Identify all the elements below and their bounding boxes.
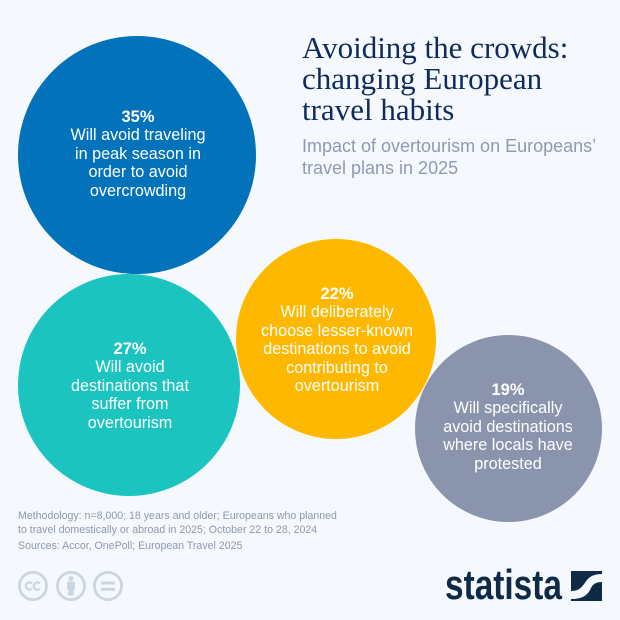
label: 22%: Will deliberately xyxy=(280,303,394,321)
label: 35%: overcrowding xyxy=(90,182,186,200)
subtitle xyxy=(302,136,596,178)
label: 35%: in peak season in xyxy=(75,145,201,163)
subtitle: Impact of overtourism on Europeans’ xyxy=(302,136,596,156)
label: 35% xyxy=(70,108,205,200)
label: 22%: overtourism xyxy=(295,377,379,395)
circle: 19% xyxy=(415,335,602,522)
title: travel habits xyxy=(302,92,454,127)
title xyxy=(302,30,568,127)
label: 19% xyxy=(443,381,573,473)
methodology note: to travel domestically or abroad in 2025; October 22 to 28, 2024 xyxy=(18,524,317,536)
label: 19%: Will specifically xyxy=(454,399,562,417)
icon: creative commons licence xyxy=(18,571,123,601)
circle: 35% xyxy=(18,36,256,274)
label: 27% xyxy=(71,340,189,432)
label: 19%: 19% xyxy=(491,381,525,399)
subtitle: travel plans in 2025 xyxy=(302,158,458,178)
label: 22%: contributing to xyxy=(286,359,388,377)
label: 22% xyxy=(261,285,413,395)
label: 22%: 22% xyxy=(320,285,354,303)
label: 27%: 27% xyxy=(113,340,147,358)
label: 27%: overtourism xyxy=(88,414,172,432)
label: 35%: Will avoid traveling xyxy=(71,126,205,144)
label: 27%: suffer from xyxy=(91,395,169,413)
label: 22%: destinations to avoid xyxy=(263,340,411,358)
label: 22%: choose lesser-known xyxy=(261,322,413,340)
label: 27%: Will avoid xyxy=(95,358,165,376)
methodology note: Methodology: n=8,000; 18 years and older; Europeans who planned xyxy=(18,510,337,522)
label: 27%: destinations that xyxy=(71,377,189,395)
label: 19%: avoid destinations xyxy=(443,418,573,436)
methodology note xyxy=(18,510,337,536)
label: 19%: where locals have xyxy=(443,436,573,454)
title: changing European xyxy=(302,61,542,96)
title: Avoiding the crowds: xyxy=(302,30,568,65)
logo: statista: statista xyxy=(445,561,562,608)
label: 19%: protested xyxy=(474,455,542,473)
label: 35%: order to avoid xyxy=(88,163,187,181)
circle: 22% xyxy=(236,239,436,439)
circle: 27% xyxy=(18,274,240,496)
label: 35%: 35% xyxy=(121,108,155,126)
sources note: Sources: Accor, OnePoll; European Travel 2025 xyxy=(18,540,242,552)
